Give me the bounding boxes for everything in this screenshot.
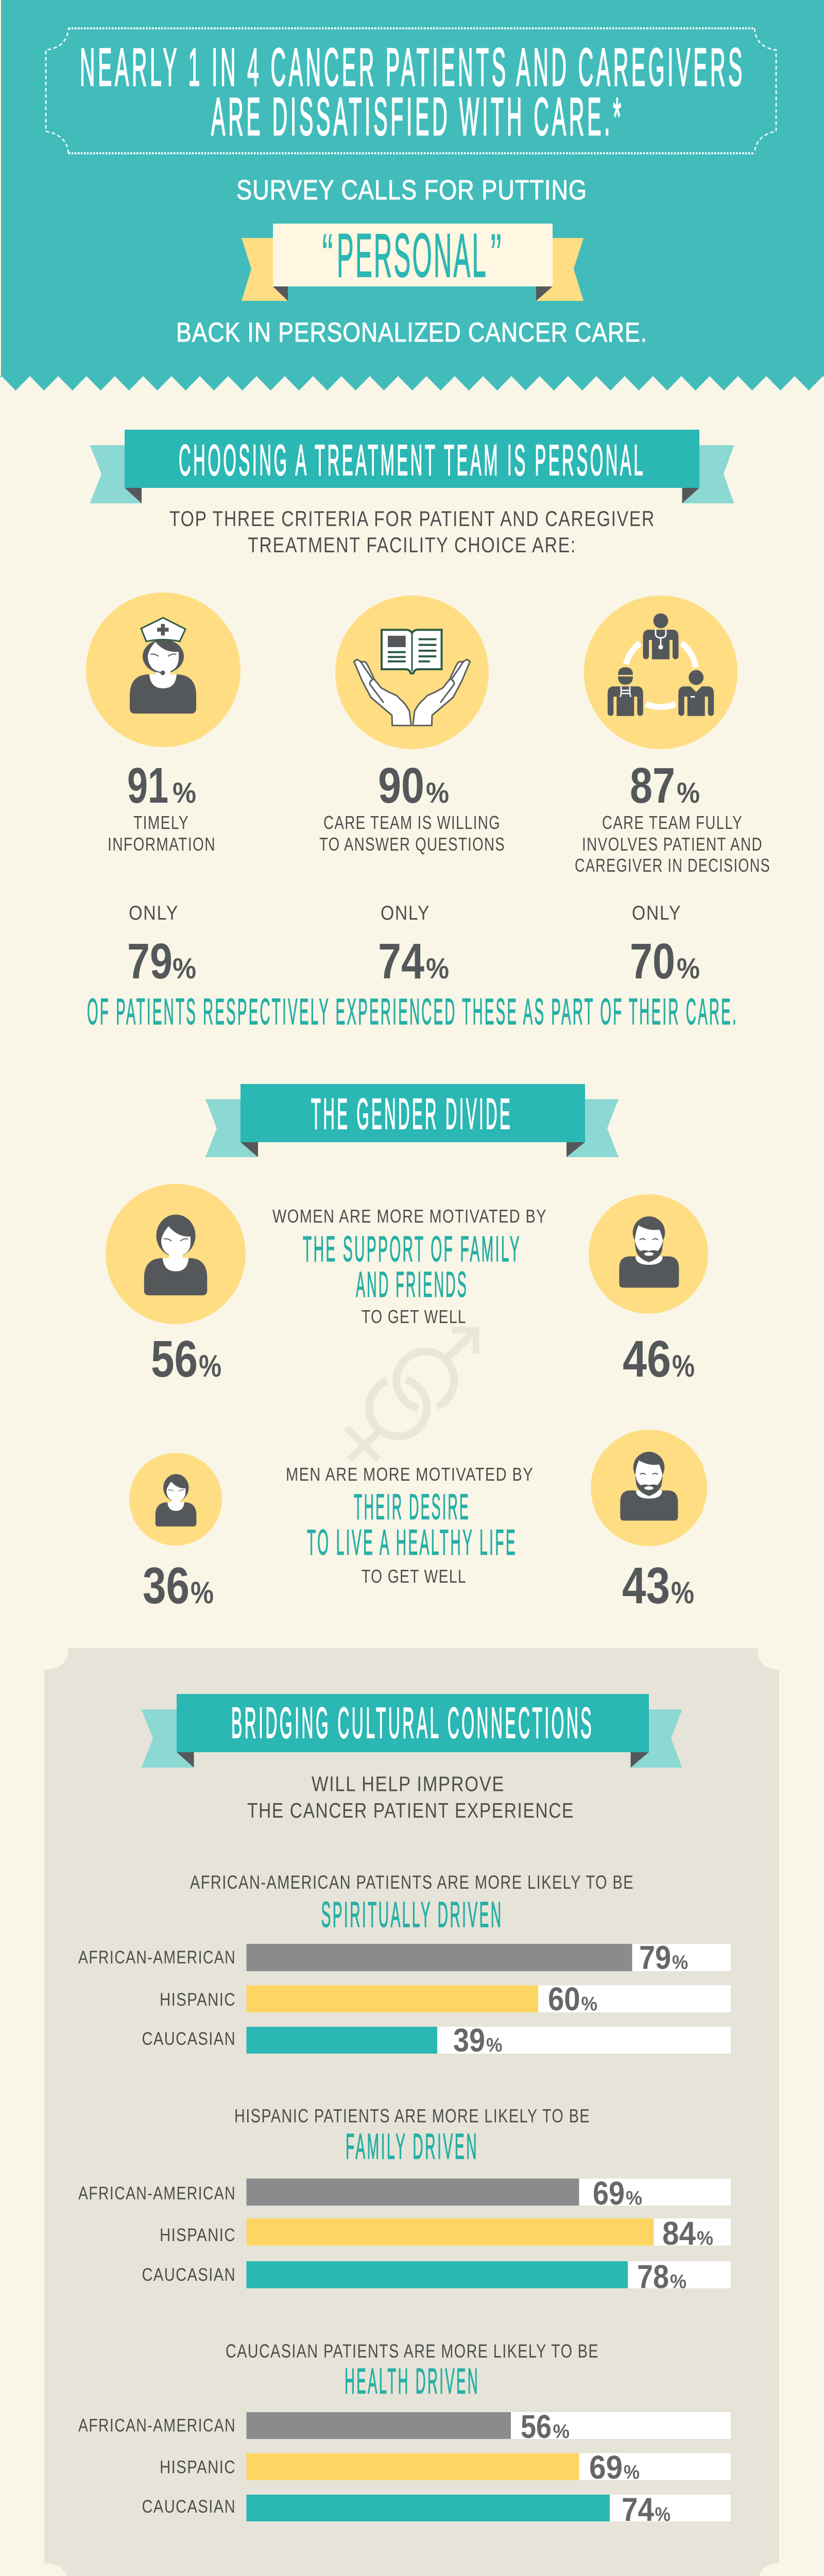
ribbon: personal: “: [322, 221, 333, 290]
stat: only 70 percent: ONLY: [632, 902, 681, 924]
intro text: TOP THREE CRITERIA FOR PATIENT AND CAREGIVER: [169, 506, 655, 531]
bar chart: health driven: 74: [622, 2491, 654, 2528]
stat: only 74 percent: [378, 902, 449, 989]
stat: only 79 percent: 79: [127, 933, 173, 989]
subtitle bottom: BACK IN PERSONALIZED CANCER CARE.: [176, 317, 647, 348]
heading: spiritually driven: AFRICAN-AMERICAN PATIENTS ARE MORE LIKELY TO BE: [190, 1872, 634, 1893]
bar chart: family driven: HISPANIC: [160, 2225, 236, 2245]
subtitle top: SURVEY CALLS FOR PUTTING: [236, 175, 587, 206]
stat: 91 percent: 91: [127, 757, 168, 814]
bar chart: health driven: %: [553, 2421, 570, 2443]
icon: gender symbols: [347, 1330, 476, 1460]
bar chart: health driven: 69: [589, 2449, 623, 2486]
stat: women 56 percent: 56: [151, 1330, 198, 1388]
heading: spiritually driven: SPIRITUALLY DRIVEN: [321, 1894, 503, 1935]
bar chart: family driven: AFRICAN-AMERICAN: [78, 2183, 236, 2204]
heading: family driven: HISPANIC PATIENTS ARE MORE LIKELY TO BE: [234, 2105, 590, 2126]
text: women motivated: WOMEN ARE MORE MOTIVATED BY: [272, 1206, 547, 1227]
intro text: TREATMENT FACILITY CHOICE ARE:: [248, 533, 576, 557]
bar chart: spiritually driven: HISPANIC: [160, 1990, 236, 2010]
panel: cultural connections: [44, 1648, 779, 2576]
stat: women 56 percent: %: [199, 1349, 221, 1383]
stat: only 74 percent: %: [426, 952, 449, 985]
bar chart: health driven: CAUCASIAN: [142, 2497, 236, 2517]
bar chart: spiritually driven: %: [486, 2035, 503, 2056]
stat: men 46 percent: %: [672, 1349, 695, 1383]
label: involves patient: [575, 812, 770, 876]
text: women motivated: AND FRIENDS: [356, 1264, 468, 1304]
bar chart: spiritually driven: %: [581, 1993, 597, 2015]
heading: family driven: [234, 2105, 590, 2166]
stat: only 79 percent: [127, 902, 196, 989]
bar chart: family driven: CAUCASIAN: [142, 2265, 236, 2285]
bar chart: spiritually driven: [78, 1939, 731, 2059]
heading ribbon: treatment team: [90, 430, 734, 503]
ribbon: personal: ”: [490, 221, 502, 290]
bar chart: family driven: [78, 2175, 731, 2295]
stat: only 70 percent: %: [677, 952, 700, 985]
bar chart: family driven: %: [670, 2271, 686, 2293]
text: men motivated: [286, 1464, 534, 1587]
heading: spiritually driven: [190, 1872, 634, 1935]
stat: men 46 percent: 46: [623, 1330, 671, 1388]
bar chart: spiritually driven: AFRICAN-AMERICAN: [78, 1947, 236, 1968]
label: answer questions: CARE TEAM IS WILLING: [323, 812, 501, 833]
bar chart: health driven: 56: [521, 2408, 552, 2445]
icon: woman, support of family: [106, 1184, 246, 1324]
bar chart: spiritually driven: 39: [453, 2022, 485, 2059]
heading ribbon: cultural connections: [141, 1694, 682, 1768]
text: women motivated: [272, 1206, 547, 1327]
stat: 90 percent: 90: [378, 757, 424, 814]
bar chart: health driven: AFRICAN-AMERICAN: [78, 2415, 236, 2436]
title: [80, 38, 745, 147]
icon: man, support of family: [589, 1194, 708, 1314]
label: timely information: INFORMATION: [108, 834, 216, 855]
heading: health driven: HEALTH DRIVEN: [345, 2361, 479, 2401]
heading ribbon: gender divide: [205, 1084, 619, 1157]
stat: only 74 percent: ONLY: [381, 902, 430, 924]
bar chart: family driven: %: [626, 2188, 642, 2209]
label: timely information: TIMELY: [133, 812, 189, 833]
bar chart: health driven: %: [624, 2462, 640, 2483]
title frame: [46, 28, 776, 154]
panel intro text: WILL HELP IMPROVE: [312, 1772, 505, 1796]
text: men motivated: TO GET WELL: [362, 1566, 467, 1587]
text: women motivated: TO GET WELL: [362, 1306, 467, 1327]
bar chart: family driven: 78: [637, 2258, 669, 2295]
label: answer questions: [319, 812, 505, 855]
bar chart: health driven: %: [655, 2504, 671, 2526]
bar chart: family driven: 84: [662, 2215, 696, 2252]
text: TO LIVE A HEALTHY LIFE: [307, 1522, 517, 1562]
stat: 87 percent: 87: [630, 757, 675, 814]
stat: only 74 percent: 74: [378, 933, 424, 989]
intro text: [169, 506, 655, 557]
bar chart: spiritually driven: 60: [548, 1980, 580, 2018]
label: involves patient: CARE TEAM FULLY: [602, 812, 743, 833]
text: men motivated: MEN ARE MORE MOTIVATED BY: [286, 1464, 534, 1485]
heading: family driven: FAMILY DRIVEN: [346, 2126, 478, 2166]
bar chart: health driven: HISPANIC: [160, 2458, 236, 2477]
bar chart: family driven: 69: [593, 2175, 625, 2212]
label: involves patient: INVOLVES PATIENT AND: [582, 834, 763, 855]
label: answer questions: TO ANSWER QUESTIONS: [319, 834, 505, 855]
stat: only 70 percent: [630, 902, 700, 989]
stat: women 36 percent: 36: [143, 1557, 190, 1615]
bar chart: health driven: [78, 2408, 731, 2528]
panel intro text: [247, 1772, 574, 1822]
stat: men 43 percent: %: [671, 1575, 694, 1610]
icon: woman, healthy life: [129, 1453, 222, 1546]
icon: care team: [584, 596, 737, 749]
panel intro text: THE CANCER PATIENT EXPERIENCE: [247, 1799, 574, 1822]
header band: [0, 0, 824, 391]
icon: man, healthy life: [591, 1430, 707, 1546]
heading: health driven: CAUCASIAN PATIENTS ARE MORE LIKELY TO BE: [226, 2341, 599, 2362]
stat: women 36 percent: %: [191, 1575, 214, 1610]
label: timely information: [108, 812, 216, 855]
stat: men 43 percent: 43: [622, 1557, 670, 1615]
bar chart: spiritually driven: 79: [639, 1939, 671, 1976]
stat: only 79 percent: ONLY: [129, 902, 179, 924]
bar chart: family driven: %: [697, 2228, 713, 2249]
stat: only 79 percent: %: [173, 952, 196, 985]
bar chart: spiritually driven: CAUCASIAN: [142, 2029, 236, 2049]
stat: only 70 percent: 70: [630, 933, 675, 989]
ribbon: personal: [242, 221, 583, 301]
stat: 90 percent: %: [426, 776, 449, 809]
stat: 87 percent: %: [677, 776, 700, 809]
icon: hands holding book: [335, 596, 489, 749]
icon: nurse: [86, 592, 241, 747]
text: men motivated: THEIR DESIRE: [354, 1487, 470, 1527]
ribbon: personal: PERSONAL: [337, 221, 488, 290]
bar chart: spiritually driven: %: [672, 1952, 688, 1974]
heading: health driven: [226, 2341, 599, 2401]
stat: 91 percent: %: [173, 776, 196, 809]
